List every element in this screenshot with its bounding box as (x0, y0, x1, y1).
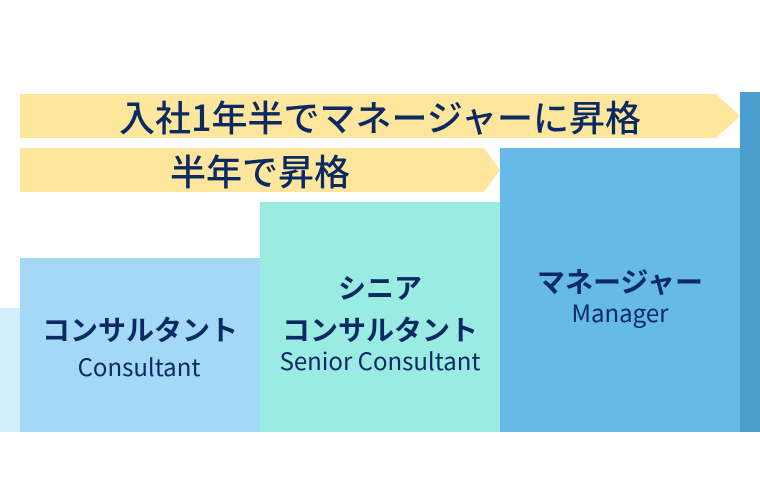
panel: senior consultant step (260, 202, 500, 432)
previous step block (0, 308, 20, 432)
banner text: 入社1年半でマネージャーに昇格 (119, 90, 641, 142)
heading: senior consultant: コンサルタント (282, 309, 478, 349)
heading: consultant: コンサルタント (42, 309, 238, 349)
label: Consultant: Consultant (78, 348, 200, 383)
heading: senior consultant (282, 267, 478, 349)
label: Senior Consultant: Senior Consultant (280, 342, 480, 377)
heading: senior consultant: シニア (338, 267, 422, 307)
banner text: 半年で昇格 (170, 144, 350, 196)
next step block (740, 92, 760, 432)
panel: manager step (500, 148, 740, 432)
arrow banner: promotion in half a year (20, 148, 500, 192)
panel: consultant step (20, 258, 260, 432)
heading: manager: マネージャー (537, 261, 703, 301)
arrow banner: promotion to manager in 1.5 years (20, 94, 740, 138)
label: Manager: Manager (572, 294, 668, 329)
